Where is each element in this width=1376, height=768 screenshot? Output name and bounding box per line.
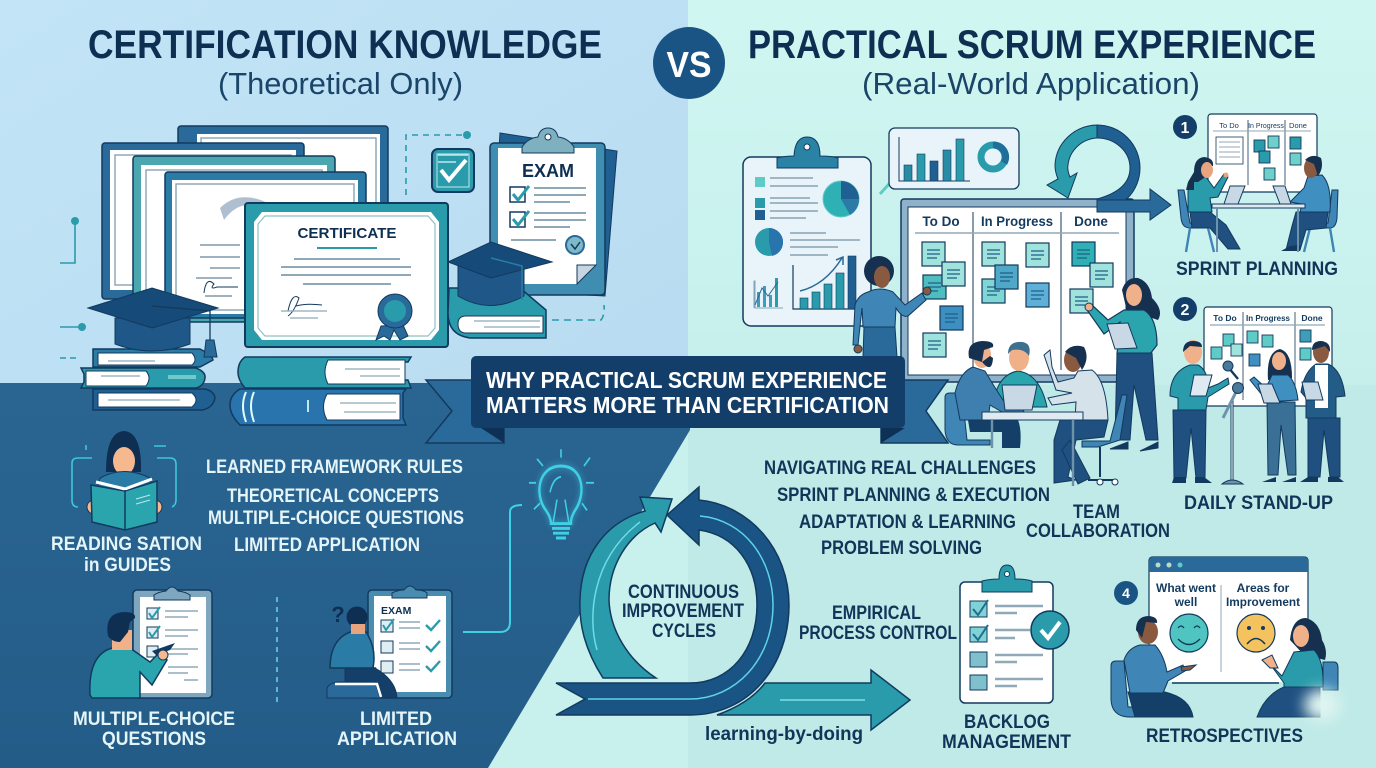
label: multiple-choice questions: QUESTIONS	[102, 729, 206, 750]
bar chart small	[754, 278, 783, 308]
panel: chart window	[889, 128, 1019, 189]
label: empirical process control: EMPIRICAL	[832, 603, 921, 624]
icon: left graduation cap	[88, 288, 218, 357]
books under left cap	[81, 349, 215, 410]
navy arc	[556, 487, 789, 715]
label: team collaboration: COLLABORATION	[1026, 521, 1170, 542]
label: sprint planning: SPRINT PLANNING	[1176, 259, 1338, 280]
kanban board main	[901, 199, 1134, 382]
man	[1286, 212, 1328, 250]
icon: VS badge	[653, 27, 725, 99]
list: certification traits: LIMITED APPLICATION	[234, 535, 420, 556]
kanban board: sprint planning: Done	[1289, 121, 1307, 130]
kanban board: daily stand-up: To Do	[1213, 313, 1237, 323]
icon: report clipboard	[743, 137, 871, 326]
label: team collaboration: TEAM	[1073, 502, 1120, 523]
icon: continuous improvement cycle arrow	[556, 487, 789, 715]
person: retro left	[1111, 616, 1196, 717]
exam clipboard	[490, 128, 617, 296]
label: daily stand-up: DAILY STAND-UP	[1184, 493, 1333, 514]
badge: number 2	[1173, 297, 1197, 321]
sticky notes	[922, 242, 1113, 357]
certificate heading: CERTIFICATE	[298, 225, 396, 242]
badge: number 4: 4	[1122, 585, 1130, 601]
table	[1212, 204, 1305, 208]
person B	[1268, 349, 1292, 380]
man 3 trousers	[1054, 420, 1108, 483]
kanban board: daily stand-up: Done	[1301, 313, 1323, 323]
bar chart growth	[793, 256, 856, 309]
column headings	[922, 214, 1108, 229]
list: certification traits: LEARNED FRAMEWORK RULES	[206, 457, 463, 478]
person A	[1173, 410, 1206, 478]
cycle label: CYCLES	[652, 621, 716, 642]
column headings: To Do	[922, 214, 960, 229]
connector: dashed lines upper left	[60, 131, 604, 358]
badge: number 1: 1	[1181, 120, 1190, 137]
woman's laptop	[1224, 186, 1245, 204]
label: multiple-choice questions	[73, 709, 235, 750]
label: learning-by-doing: learning-by-doing	[705, 724, 863, 745]
badge: number 4	[1114, 581, 1138, 605]
man's laptop	[1273, 186, 1291, 204]
retro headings: Areas for	[1237, 581, 1290, 595]
banner	[426, 356, 948, 443]
laptop	[1002, 385, 1037, 410]
label: empirical process control	[799, 603, 957, 644]
label: limited application: APPLICATION	[337, 729, 457, 750]
arrow: learning by doing	[717, 670, 910, 730]
question mark: ?	[331, 602, 345, 627]
certificates: stacked	[102, 126, 388, 322]
list: certification traits	[206, 457, 464, 556]
chair left	[945, 393, 990, 445]
signature	[288, 297, 322, 316]
icon: ribbon seal	[376, 294, 412, 340]
retro headings: well	[1174, 595, 1197, 609]
teal arc	[580, 497, 672, 678]
pie chart	[823, 181, 859, 217]
cycle label	[622, 582, 744, 642]
cycle label: CONTINUOUS	[628, 582, 739, 603]
list: experience traits: SPRINT PLANNING & EXECUTION	[777, 485, 1050, 506]
label: multiple-choice questions: MULTIPLE-CHOICE	[73, 709, 235, 730]
label: limited application: LIMITED	[360, 709, 432, 730]
icon: person at exam clipboard	[327, 586, 452, 698]
people: stand-up	[1170, 340, 1345, 483]
certificate: main	[245, 203, 448, 347]
panel: retrospective window	[1149, 557, 1308, 683]
icon: sad face	[1237, 614, 1275, 652]
badge: number 1	[1173, 115, 1197, 139]
list: certification traits: THEORETICAL CONCEPTS	[227, 486, 439, 507]
icon: checklist badge	[432, 149, 474, 192]
person: presenter left	[853, 256, 931, 357]
kanban board: daily stand-up	[1204, 307, 1332, 406]
icon: backlog clipboard	[960, 565, 1069, 703]
label: limited application	[337, 709, 457, 750]
label: retrospectives: RETROSPECTIVES	[1146, 726, 1303, 747]
icon: right graduation cap	[448, 242, 552, 306]
microphones	[1222, 361, 1244, 484]
background: right lower band	[688, 385, 1376, 768]
list: experience traits	[764, 458, 1050, 559]
icon: VS badge: VS	[666, 44, 712, 85]
kanban board: daily stand-up: In Progress	[1246, 313, 1290, 323]
kanban board: sprint planning: To Do	[1219, 121, 1239, 130]
person C	[1308, 418, 1340, 477]
label: backlog management: BACKLOG	[964, 712, 1050, 733]
table	[982, 412, 1083, 420]
background: dark lower left panel	[0, 383, 690, 768]
label: empirical process control: PROCESS CONTROL	[799, 623, 957, 644]
list: experience traits: ADAPTATION & LEARNING	[799, 512, 1016, 533]
books under right cap	[448, 288, 546, 338]
list: experience traits: PROBLEM SOLVING	[821, 538, 982, 559]
decorative smudge	[1304, 689, 1340, 721]
man 1	[968, 420, 1021, 448]
column headings: Done	[1074, 214, 1108, 229]
arrow: to sprint planning	[1097, 189, 1171, 220]
kanban board: sprint planning	[1208, 114, 1317, 192]
retro headings: Improvement	[1226, 595, 1300, 609]
badge: number 2: 2	[1181, 302, 1190, 319]
books centre stack	[230, 357, 411, 425]
title: certification knowledge	[88, 23, 602, 101]
banner: MATTERS MORE THAN CERTIFICATION	[486, 392, 889, 418]
kanban board: sprint planning: In Progress	[1248, 123, 1284, 130]
chair right	[1082, 395, 1127, 447]
icon: person reading	[72, 431, 176, 530]
person: retro right	[1257, 618, 1338, 717]
connector: bulb line	[463, 505, 522, 632]
icon: lightbulb	[529, 449, 594, 538]
title: certification knowledge: (Theoretical Only)	[218, 66, 463, 101]
retro headings	[1156, 581, 1300, 609]
title: practical scrum experience: (Real-World Application)	[862, 66, 1200, 101]
icon: happy face	[1170, 614, 1208, 652]
banner text: WHY PRACTICAL SCRUM EXPERIENCE	[486, 367, 887, 393]
label: reading station	[51, 534, 202, 576]
connector: report to chart	[880, 184, 889, 194]
exam small heading: EXAM	[381, 605, 412, 617]
icon: person with multiple choice clipboard	[90, 587, 212, 698]
title: certification knowledge: CERTIFICATION KNOWLEDGE	[88, 23, 602, 67]
list: certification traits: MULTIPLE-CHOICE QUESTIONS	[208, 508, 464, 529]
people: team at table	[945, 341, 1127, 486]
pie chart small	[755, 228, 783, 256]
people: sprint planning table	[1178, 156, 1338, 252]
cycle label: IMPROVEMENT	[622, 601, 744, 622]
divider: dashed vertical	[276, 597, 278, 703]
banner tails	[426, 380, 504, 443]
icon: refresh arrow top	[1047, 125, 1171, 220]
title: practical scrum experience	[748, 23, 1316, 101]
woman	[1190, 212, 1240, 249]
exam heading: EXAM	[522, 161, 574, 181]
list: experience traits: NAVIGATING REAL CHALLENGES	[764, 458, 1036, 479]
background: left panel	[0, 0, 688, 430]
man 3	[1044, 350, 1108, 420]
label: reading station: READING SATION	[51, 534, 202, 555]
label: team collaboration	[1026, 502, 1170, 542]
man 2	[993, 371, 1047, 407]
chairs	[1178, 190, 1215, 228]
person: presenter right	[1085, 278, 1160, 451]
background: right panel	[688, 0, 1376, 385]
column headings: In Progress	[981, 214, 1053, 229]
label: backlog management	[942, 712, 1071, 753]
label: reading station: in GUIDES	[84, 555, 171, 576]
label: backlog management: MANAGEMENT	[942, 732, 1071, 753]
retro headings: What went	[1156, 581, 1216, 595]
